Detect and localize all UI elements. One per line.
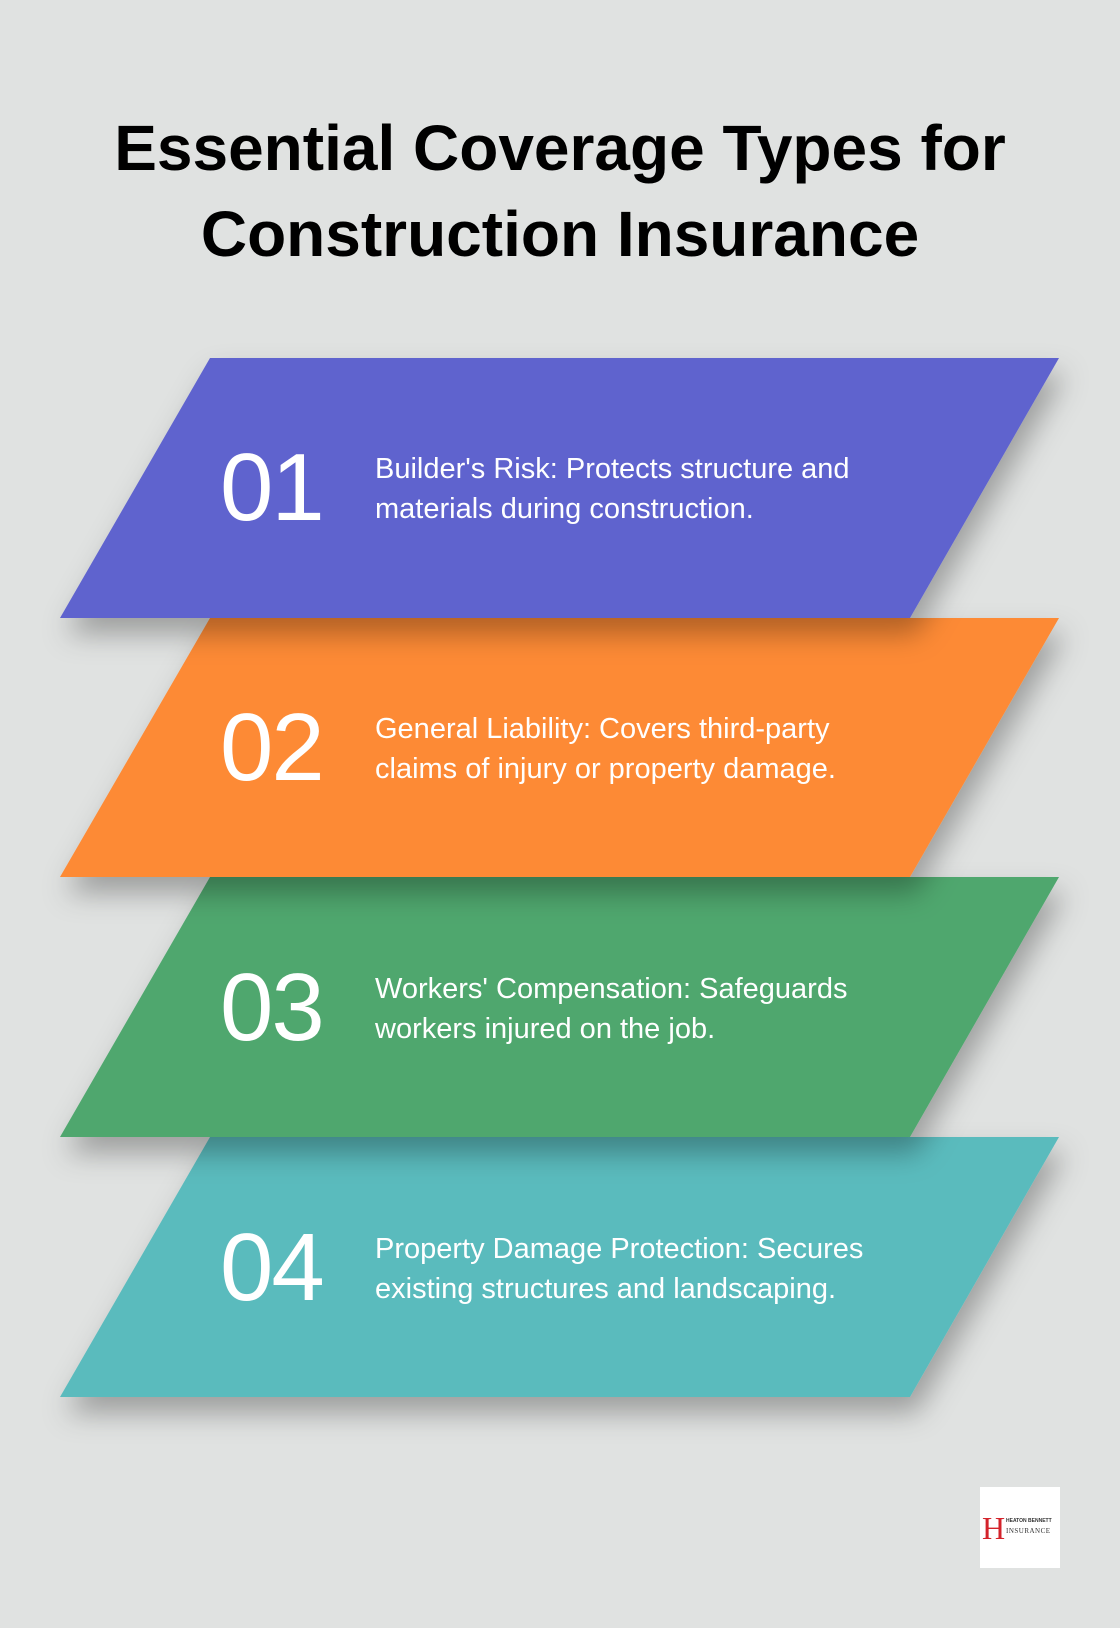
number 03: 03 [220, 954, 323, 1061]
title [114, 112, 1006, 270]
band 2 [60, 618, 1059, 877]
band 3 [60, 877, 1059, 1137]
band 1 [60, 358, 1059, 618]
text 04: Property Damage Protection: Secures existing structures and landscaping. [375, 1233, 863, 1305]
logo: INSURANCE [1006, 1527, 1051, 1535]
text 01: Builder's Risk: Protects structure and materials during construction. [375, 453, 850, 525]
title: Construction Insurance [201, 198, 919, 270]
band 4 [60, 1137, 1059, 1397]
number 02: 02 [220, 694, 323, 801]
number 04: 04 [220, 1214, 323, 1321]
text 03: Workers' Compensation: Safeguards workers injured on the job. [375, 973, 847, 1045]
logo: H [982, 1510, 1005, 1546]
number 01: 01 [220, 434, 323, 541]
logo: HEATON BENNETT [1006, 1518, 1052, 1524]
text 02: General Liability: Covers third-party claims of injury or property damage. [375, 713, 836, 785]
logo [980, 1487, 1060, 1568]
title: Essential Coverage Types for [114, 112, 1006, 184]
